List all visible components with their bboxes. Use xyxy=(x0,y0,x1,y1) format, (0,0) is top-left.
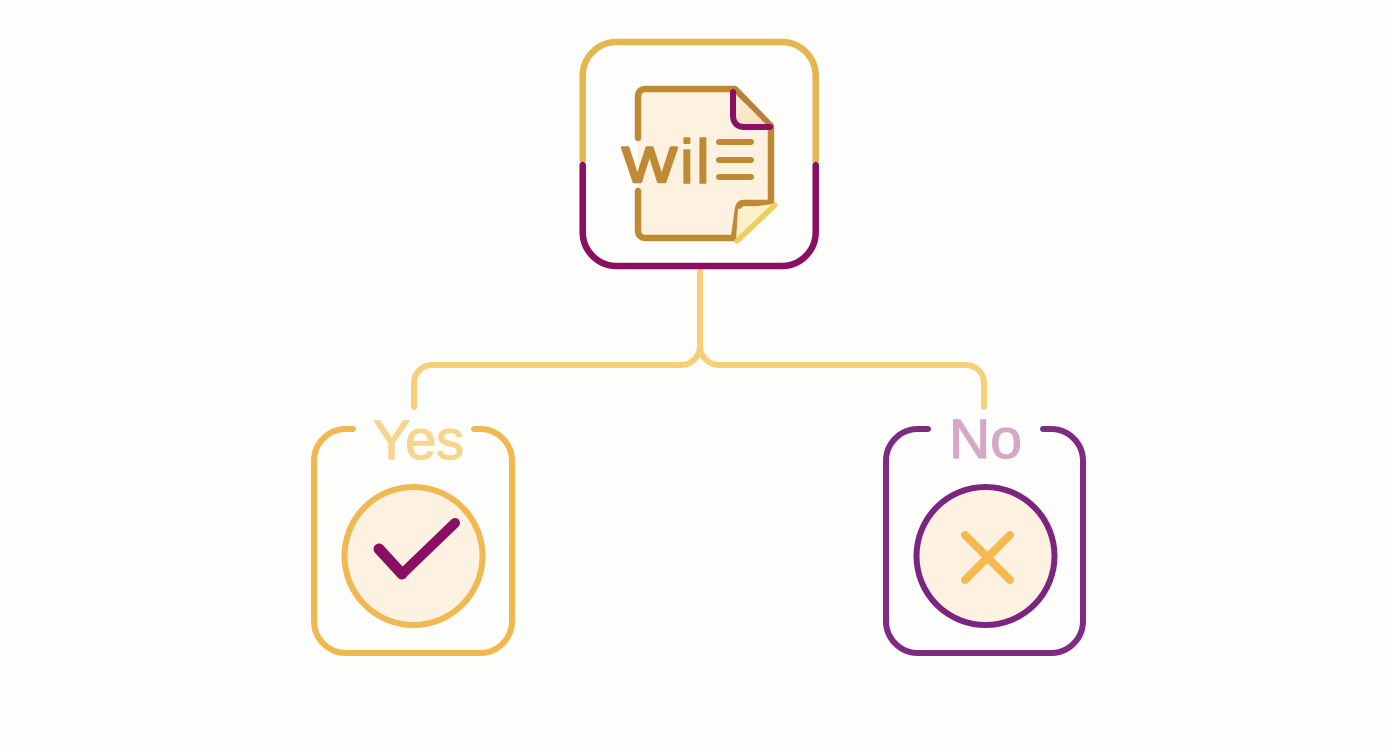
panel: will document xyxy=(583,42,816,266)
icon: check circle xyxy=(344,487,482,625)
word: Wil: W xyxy=(622,137,678,193)
frame: bottom half xyxy=(583,165,816,266)
frame: yes xyxy=(314,429,512,653)
panel: yes outcome xyxy=(314,408,512,653)
word: Wil: i xyxy=(680,128,694,197)
panel: no outcome xyxy=(886,407,1083,653)
icon: cross circle xyxy=(916,487,1054,625)
frame: no xyxy=(886,429,1083,653)
word: Wil xyxy=(622,128,710,197)
connector: branching lines xyxy=(414,272,984,407)
frame: top half xyxy=(583,42,816,162)
icon: text lines xyxy=(719,142,751,177)
label: No: No xyxy=(949,407,1022,470)
icon: document xyxy=(622,89,775,241)
word: Wil: l xyxy=(696,128,710,197)
label: Yes: Yes xyxy=(373,408,464,471)
